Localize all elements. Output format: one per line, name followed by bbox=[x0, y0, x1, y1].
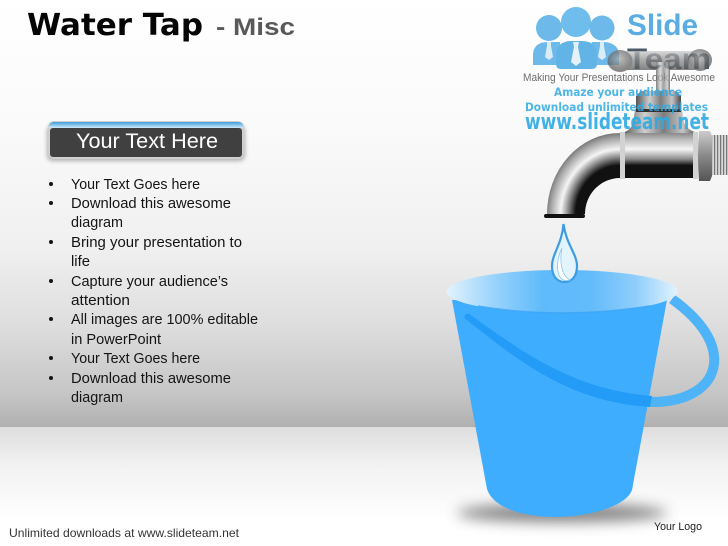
background wall bbox=[0, 0, 728, 427]
button heading: Your Text Here bbox=[76, 130, 218, 153]
logo tagline: Making Your Presentations Look Awesome bbox=[523, 72, 715, 84]
tap elbow bbox=[547, 133, 620, 214]
logo word Slide: Slide bbox=[627, 9, 698, 42]
icon: three business people bbox=[533, 7, 619, 69]
bullet list: All images are 100% editable bbox=[71, 312, 258, 328]
icon: water tap bbox=[544, 49, 728, 218]
tap hex nut bbox=[698, 131, 712, 181]
logo promo text: Download unlimited templates bbox=[525, 100, 708, 114]
logo word Team: Team bbox=[627, 43, 711, 76]
bullet list: diagram bbox=[71, 215, 123, 231]
tap collars bbox=[620, 132, 698, 179]
bucket handle rear bbox=[648, 299, 714, 402]
tap spout lip bbox=[544, 214, 585, 218]
bullet list: Capture your audience’s bbox=[71, 274, 228, 290]
bullet list: Download this awesome bbox=[71, 196, 231, 212]
tap valve nut bbox=[636, 91, 681, 110]
logo promo text: Amaze your audience bbox=[554, 85, 682, 99]
bullet list: diagram bbox=[71, 390, 123, 406]
tap threads bbox=[712, 135, 728, 175]
bullet list: life bbox=[71, 254, 90, 270]
bucket body bbox=[452, 300, 667, 517]
bullet list: Bring your presentation to bbox=[71, 235, 242, 251]
bullet list: in PowerPoint bbox=[71, 332, 161, 348]
bullet list bbox=[49, 177, 258, 406]
title: Water Tap bbox=[27, 8, 203, 43]
background floor bbox=[0, 427, 728, 546]
tap horizontal pipe bbox=[620, 133, 696, 178]
bullet list: attention bbox=[71, 293, 130, 309]
title bbox=[27, 8, 295, 43]
footer text: Unlimited downloads at www.slideteam.net bbox=[9, 526, 240, 540]
logo: Slide Team bbox=[523, 7, 715, 84]
bullet list: Download this awesome bbox=[71, 371, 231, 387]
tap handle bbox=[608, 49, 712, 92]
icon: water drop bbox=[552, 224, 577, 282]
title: - Misc bbox=[216, 14, 295, 41]
bucket handle front bbox=[464, 314, 652, 407]
bucket rim bbox=[446, 270, 678, 313]
your logo label: Your Logo bbox=[654, 521, 702, 533]
bucket shadow bbox=[457, 504, 667, 522]
bullet list: Your Text Goes here bbox=[71, 351, 200, 367]
button heading bbox=[47, 121, 245, 161]
tap valve body bbox=[622, 110, 698, 133]
icon: bucket bbox=[446, 270, 714, 517]
logo promo text bbox=[525, 85, 709, 135]
bullet list: Your Text Goes here bbox=[71, 177, 200, 193]
